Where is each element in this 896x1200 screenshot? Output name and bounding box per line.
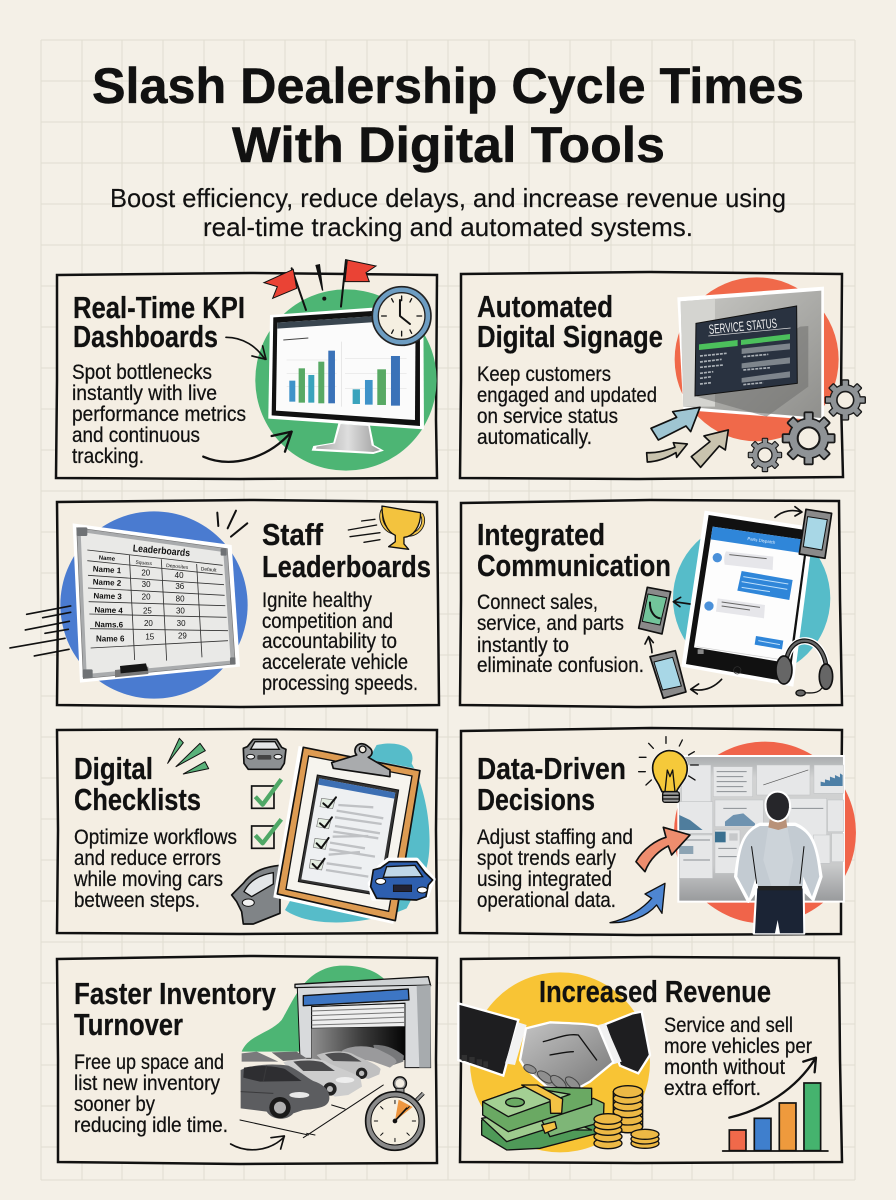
heading <box>74 751 201 817</box>
body text <box>477 591 644 677</box>
body text <box>664 1014 812 1100</box>
body text: automatically. <box>477 426 592 449</box>
body text: Connect sales, <box>477 591 598 614</box>
body text: spot trends early <box>477 847 616 870</box>
body text: extra effort. <box>664 1077 761 1100</box>
body text: Free up space and <box>74 1051 224 1074</box>
illustration: tablet chat with phones and headset: Parts Dispatch <box>747 536 776 545</box>
illustration: whiteboard leaderboard: 25 <box>143 606 152 615</box>
icon: stopwatch <box>366 1077 424 1150</box>
icon: gray car top <box>243 739 286 769</box>
body text: Service and sell <box>664 1014 793 1037</box>
body text: Ignite healthy <box>262 589 372 612</box>
body text: month without <box>664 1056 785 1079</box>
icon: cash stacks <box>482 1085 604 1150</box>
subtitle: Boost efficiency, reduce delays, and increase revenue using <box>110 183 786 213</box>
icon: gray car left <box>232 865 280 924</box>
illustration: tablet chat with phones and headset <box>639 507 833 698</box>
panel: Increased Revenue <box>458 957 842 1163</box>
heading: Checklists <box>74 782 201 817</box>
body text: instantly with live <box>72 382 217 405</box>
title: With Digital Tools <box>232 117 665 173</box>
garage <box>295 977 431 1068</box>
heading <box>477 751 626 817</box>
body text: list new inventory <box>74 1072 220 1095</box>
body text: and reduce errors <box>74 847 221 870</box>
illustration: garage, parked cars and stopwatch <box>231 966 431 1150</box>
illustration: KPI monitor with clock and flags <box>203 260 437 471</box>
heading: Dashboards <box>73 319 218 354</box>
body text: competition and <box>262 610 393 633</box>
illustration: whiteboard leaderboard: Name 2 <box>93 577 122 588</box>
illustration: whiteboard leaderboard: Nams.6 <box>95 620 124 629</box>
body text: Spot bottlenecks <box>72 361 212 384</box>
man seen from behind <box>735 792 821 933</box>
illustration: whiteboard leaderboard: Name 4 <box>94 605 124 615</box>
body text: while moving cars <box>73 868 223 891</box>
body text: on service status <box>477 405 618 428</box>
icon: phone bottom <box>650 651 686 698</box>
panel: Staff Leaderboards <box>10 500 439 707</box>
title: Slash Dealership Cycle Times <box>92 58 804 114</box>
heading: Staff <box>262 517 324 552</box>
body text: Optimize workflows <box>74 826 237 849</box>
subtitle: real-time tracking and automated systems. <box>203 212 693 242</box>
body text: sooner by <box>74 1093 155 1116</box>
body text <box>72 361 246 468</box>
heading: Data-Driven <box>477 751 626 786</box>
heading: Digital <box>74 751 153 786</box>
body text: Adjust staffing and <box>477 826 633 849</box>
heading: Decisions <box>477 782 595 817</box>
illustration: whiteboard leaderboard: 20 <box>142 593 151 602</box>
illustration: whiteboard leaderboard: Squass <box>135 560 153 567</box>
heading: Leaderboards <box>262 549 431 584</box>
illustration: whiteboard leaderboard: 20 <box>141 568 151 577</box>
heading <box>477 289 663 354</box>
illustration: whiteboard leaderboard: Deposites <box>166 563 189 571</box>
body text: Keep customers <box>477 363 611 386</box>
body text: reducing idle time. <box>74 1114 228 1137</box>
body text: performance metrics <box>72 403 246 426</box>
panel: Digital Checklists <box>57 729 437 934</box>
body text: tracking. <box>72 445 144 468</box>
illustration: whiteboard leaderboard: 36 <box>175 582 185 591</box>
subtitle <box>110 183 786 242</box>
body text: accountability to <box>262 630 397 653</box>
illustration: whiteboard leaderboard: 40 <box>175 571 184 580</box>
panel: Integrated Communication <box>460 500 842 707</box>
illustration: service status screen with arrows and gears: SERVICE STATUS <box>708 315 778 337</box>
heading <box>477 517 671 583</box>
body text: engaged and updated <box>477 384 657 407</box>
illustration: whiteboard leaderboard: 15 <box>145 633 155 642</box>
icon: check boxes <box>252 779 281 848</box>
body text <box>74 1051 228 1137</box>
icon: blue car <box>370 860 433 900</box>
icon: green burst <box>168 738 209 774</box>
heading: Increased Revenue <box>539 974 771 1009</box>
illustration: whiteboard leaderboard: Default <box>200 566 217 574</box>
illustration: whiteboard leaderboard: Leaderboards <box>132 543 191 559</box>
icon: growth bar chart <box>723 1058 828 1151</box>
icon: blue arrow <box>610 883 665 923</box>
illustration: whiteboard leaderboard: 80 <box>176 594 185 603</box>
illustration: whiteboard leaderboard: 30 <box>177 619 186 628</box>
panel: Automated Digital Signage <box>460 272 865 479</box>
illustration: service status screen with arrows and gears <box>647 277 865 472</box>
heading: Integrated <box>477 517 605 552</box>
illustration: whiteboard leaderboard: Name 3 <box>93 591 123 601</box>
body text: between steps. <box>74 889 200 912</box>
title <box>92 58 804 173</box>
illustration: clipboard checklist and cars <box>168 738 433 924</box>
body text: service, and parts <box>477 612 624 635</box>
heading: Faster Inventory <box>74 976 277 1011</box>
panel: Real-Time KPI Dashboards <box>56 260 437 479</box>
heading <box>73 290 245 354</box>
icon: orange arrow <box>636 827 690 872</box>
body text: eliminate confusion. <box>477 654 644 677</box>
body text <box>477 363 657 449</box>
illustration: whiteboard leaderboard: Name 6 <box>96 634 125 643</box>
heading: Turnover <box>74 1007 183 1042</box>
body text <box>262 589 418 695</box>
illustration: whiteboard leaderboard <box>10 506 423 699</box>
heading: Real-Time KPI <box>73 290 245 325</box>
icon: phone left <box>639 587 671 634</box>
icon: headset <box>776 641 833 696</box>
body text: using integrated <box>477 868 612 891</box>
illustration: whiteboard leaderboard: Name <box>98 555 116 563</box>
panel: Faster Inventory Turnover <box>57 956 437 1164</box>
body text: instantly to <box>477 634 569 657</box>
body text <box>477 826 633 912</box>
body text: and continuous <box>72 424 200 447</box>
heading: Automated <box>477 289 613 324</box>
illustration: whiteboard leaderboard: 30 <box>176 607 185 616</box>
illustration: whiteboard leaderboard: 20 <box>144 619 153 628</box>
illustration: man viewing data wall <box>610 737 856 933</box>
body text: operational data. <box>477 889 616 912</box>
illustration: handshake, cash and coins <box>458 972 828 1152</box>
illustration: whiteboard leaderboard: 30 <box>142 580 151 589</box>
heading: Communication <box>477 548 671 583</box>
body text: processing speeds. <box>262 672 418 695</box>
body text: accelerate vehicle <box>262 651 408 674</box>
heading: Digital Signage <box>477 319 663 354</box>
body text <box>73 826 237 912</box>
illustration: whiteboard leaderboard: 29 <box>178 632 187 641</box>
icon: trophy <box>348 506 423 549</box>
heading <box>262 517 431 584</box>
body text: more vehicles per <box>664 1035 812 1058</box>
icon: light bulb <box>639 737 698 802</box>
parked cars <box>241 1045 404 1119</box>
panel: Data-Driven Decisions <box>460 728 856 935</box>
illustration: whiteboard leaderboard: Name 1 <box>93 564 122 575</box>
heading <box>74 976 277 1042</box>
icon: phone top right <box>799 509 832 558</box>
icon: coins <box>594 1086 659 1149</box>
